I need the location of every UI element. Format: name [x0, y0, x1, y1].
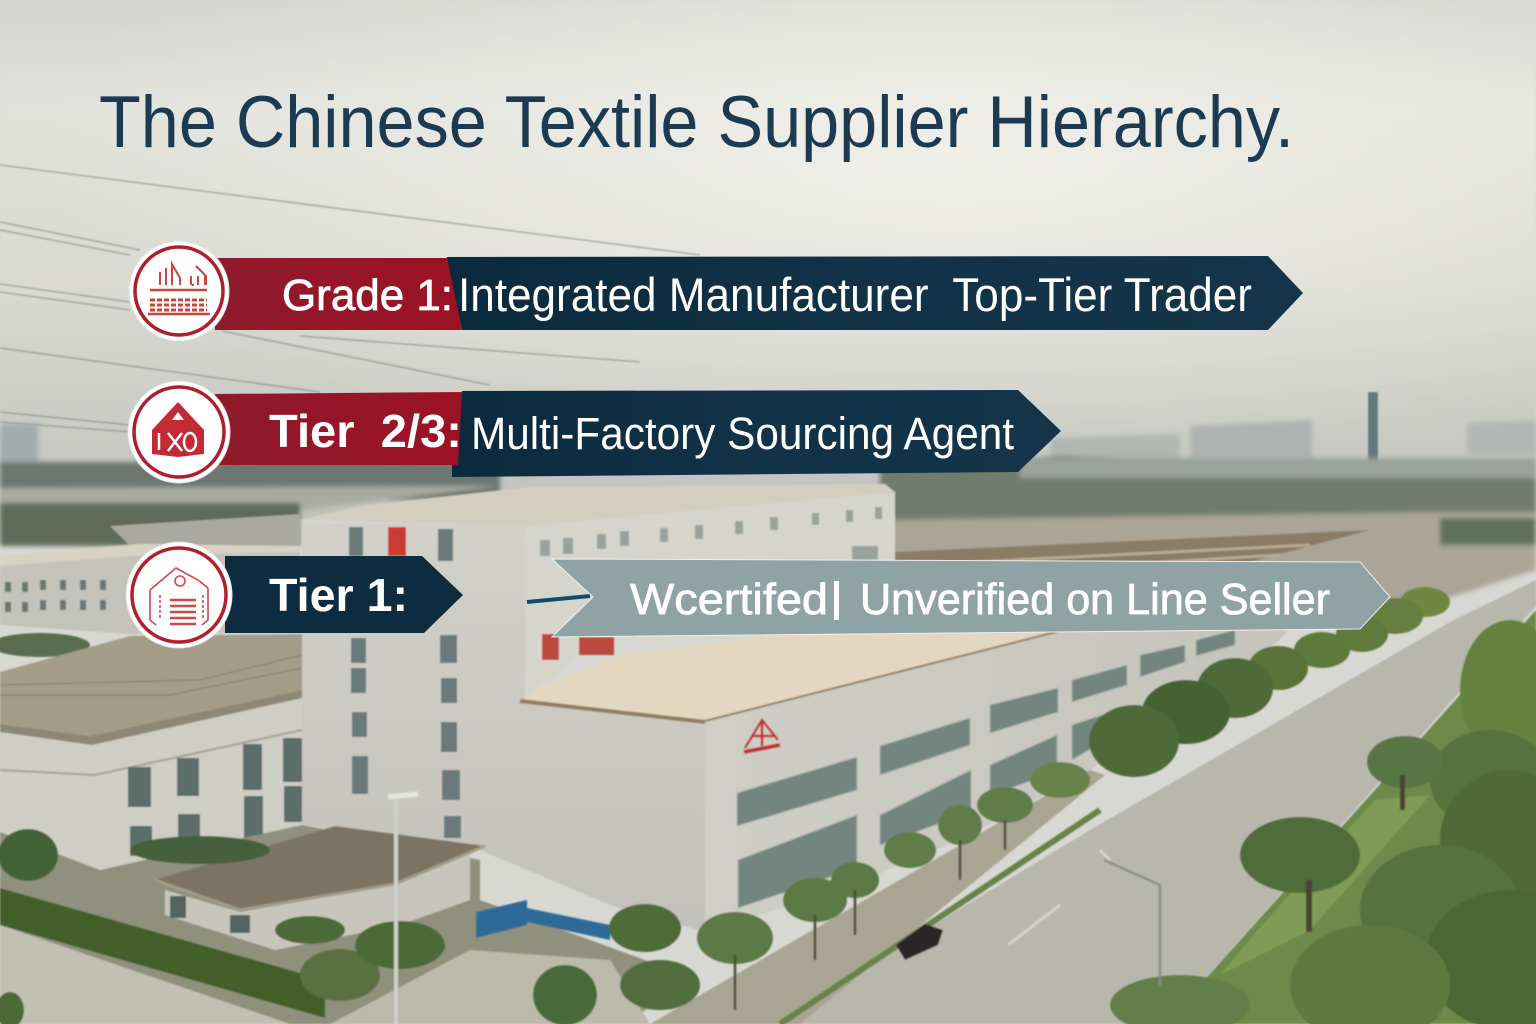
main roof: [522, 632, 1060, 722]
red window panel: [388, 527, 406, 556]
label: Tier 1: Tier 1:: [269, 569, 408, 621]
banner: Grade 1 integrated manufacturer: [215, 256, 1303, 330]
lamp post: [388, 794, 1160, 1024]
roof edge: [520, 632, 1060, 722]
main factory: tower roof: [298, 484, 895, 526]
shrubs and hedge: [0, 829, 445, 1024]
label: Grade 1: Grade 1:: [282, 271, 453, 320]
banner navy arrow: [452, 390, 1061, 477]
tree line along the factory: [1089, 587, 1450, 777]
tower right wall windows: [540, 507, 882, 560]
icon: house seal: [128, 381, 230, 483]
connector dash: [527, 596, 590, 602]
young trees along the sidewalk: [533, 762, 1105, 1024]
text: Unverified on Line Seller: Unverified on Line Seller: [860, 575, 1330, 624]
left warehouse: [0, 634, 303, 870]
banner red section: [215, 258, 462, 330]
grass patch: [1220, 795, 1430, 975]
text: Wcertifed: Wcertifed: [630, 575, 828, 624]
main factory: tower front wall: [302, 522, 705, 932]
text: Integrated Manufacturer Top-Tier Trader: Integrated Manufacturer Top-Tier Trader: [458, 268, 1252, 321]
banner: uncertified online seller: [552, 559, 1390, 637]
banner navy arrow: [447, 256, 1303, 330]
main factory: long side wall: [705, 628, 1290, 932]
road: [770, 580, 1536, 1024]
corner column: [705, 716, 735, 932]
tower windows: [349, 527, 461, 838]
main factory: tower right side wall: [525, 492, 895, 700]
car on road: [896, 924, 943, 960]
right green verge: [1165, 610, 1536, 1024]
distant skyline: [0, 420, 1536, 465]
title: The Chinese Textile Supplier Hierarchy.: [99, 82, 1294, 163]
midground land and trees: [0, 456, 1536, 640]
distant chimney: [1368, 392, 1378, 492]
banner: Tier 2/3 multi-factory sourcing agent: [215, 390, 1061, 477]
factory window bands: [737, 630, 1235, 908]
isolated green trees: [1240, 736, 1443, 932]
foreground ground and pavement: [0, 825, 700, 1024]
icon: factory seal: [129, 241, 229, 341]
text: Multi-Factory Sourcing Agent: Multi-Factory Sourcing Agent: [471, 408, 1014, 459]
striped farmland: [895, 530, 1370, 590]
factory logo: [744, 720, 780, 752]
banner navy arrow: [225, 556, 463, 633]
label: Tier 2/3: Tier 2/3:: [269, 405, 462, 457]
banner arrow: [552, 559, 1390, 637]
sky: [0, 0, 1536, 520]
power lines: [0, 165, 700, 432]
bottom right trees: [1110, 620, 1536, 1024]
road markings: [1008, 850, 1110, 945]
red panels on tower: [542, 634, 614, 660]
far left building: [0, 514, 300, 657]
blue fence: [476, 900, 610, 940]
banner red section: [215, 392, 466, 465]
divider bar: [834, 581, 839, 620]
banner: Tier 1: [225, 556, 463, 633]
low annex building: [155, 826, 485, 950]
icon: document seal: [126, 542, 232, 648]
